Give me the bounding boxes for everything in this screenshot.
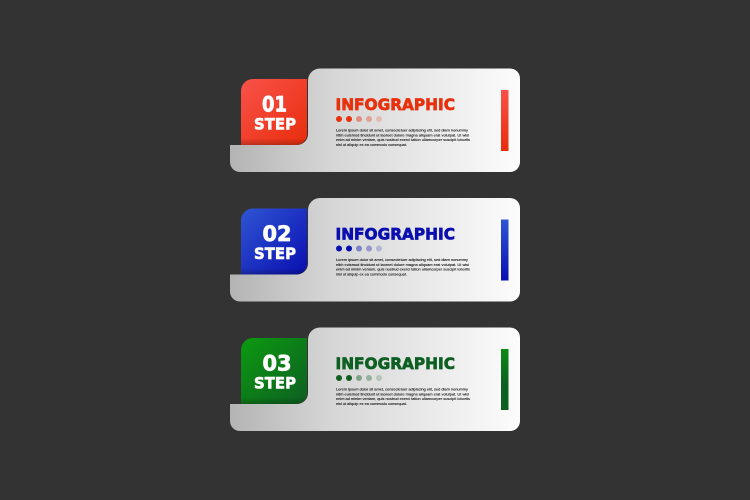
step 3 accent bar (501, 349, 508, 410)
badge 2 (241, 208, 307, 274)
step 1 dots (336, 116, 382, 122)
step 3 body text: nisl ut aliquip ex ea commodo consequat. (336, 401, 407, 406)
step 1 body text: Lorem ipsum dolor sit amet, consectetuer adipiscing elit, sed diam nonummy (336, 128, 468, 132)
step 2 body text (336, 257, 470, 276)
step 3 label: STEP (254, 374, 296, 393)
step 3 number: 03 (262, 352, 292, 376)
step 2 panel (230, 198, 520, 302)
step 2 label: STEP (254, 244, 296, 263)
step 2 body text: nibh euismod tincidunt ut laoreet dolore magna aliquam erat volutpat. Ut wisi (336, 262, 469, 267)
step 2 body text: enim ad minim veniam, quis nostrud exerci tation ullamcorper suscipit lobortis (336, 267, 470, 272)
badge 1 (241, 79, 307, 145)
step 2 accent bar (501, 220, 508, 280)
step 2 dots (336, 246, 382, 252)
step 1 body text (336, 128, 470, 147)
step 1 label: STEP (254, 115, 296, 134)
step 1 body text: nisl ut aliquip ex ea commodo consequat. (336, 142, 407, 147)
step 3 panel (230, 328, 520, 431)
card 3 background (230, 328, 520, 431)
step 1 number: 01 (262, 92, 287, 118)
step 3 dots (336, 375, 382, 381)
step 3 body text (336, 386, 470, 406)
step 3 body text: enim ad minim veniam, quis nostrud exerci tation ullamcorper suscipit lobortis (336, 396, 470, 401)
step 3 body text: Lorem ipsum dolor sit amet, consectetuer adipiscing elit, sed diam nonummy (336, 386, 468, 392)
step 2 body text: nisl ut aliquip ex ea commodo consequat. (336, 271, 407, 276)
badge 3 (241, 338, 307, 404)
step 2 body text: Lorem ipsum dolor sit amet, consectetuer adipiscing elit, sed diam nonummy (336, 257, 468, 262)
step 1 body text: enim ad minim veniam, quis nostrud exerci tation ullamcorper suscipit lobortis (336, 137, 470, 142)
step 3 body text: nibh euismod tincidunt ut laoreet dolore magna aliquam erat volutpat. Ut wisi (336, 391, 469, 396)
step 1 heading: INFOGRAPHIC (336, 95, 455, 114)
step 3 heading: INFOGRAPHIC (336, 354, 455, 373)
card 1 background (230, 68, 520, 172)
step 1 body text: nibh euismod tincidunt ut laoreet dolore magna aliquam erat volutpat. Ut wisi (336, 132, 469, 137)
step 2 heading: INFOGRAPHIC (336, 224, 455, 243)
step 1 panel (230, 68, 520, 172)
card 2 background (230, 198, 520, 302)
step 2 number: 02 (262, 222, 292, 247)
step 1 accent bar (501, 90, 508, 151)
